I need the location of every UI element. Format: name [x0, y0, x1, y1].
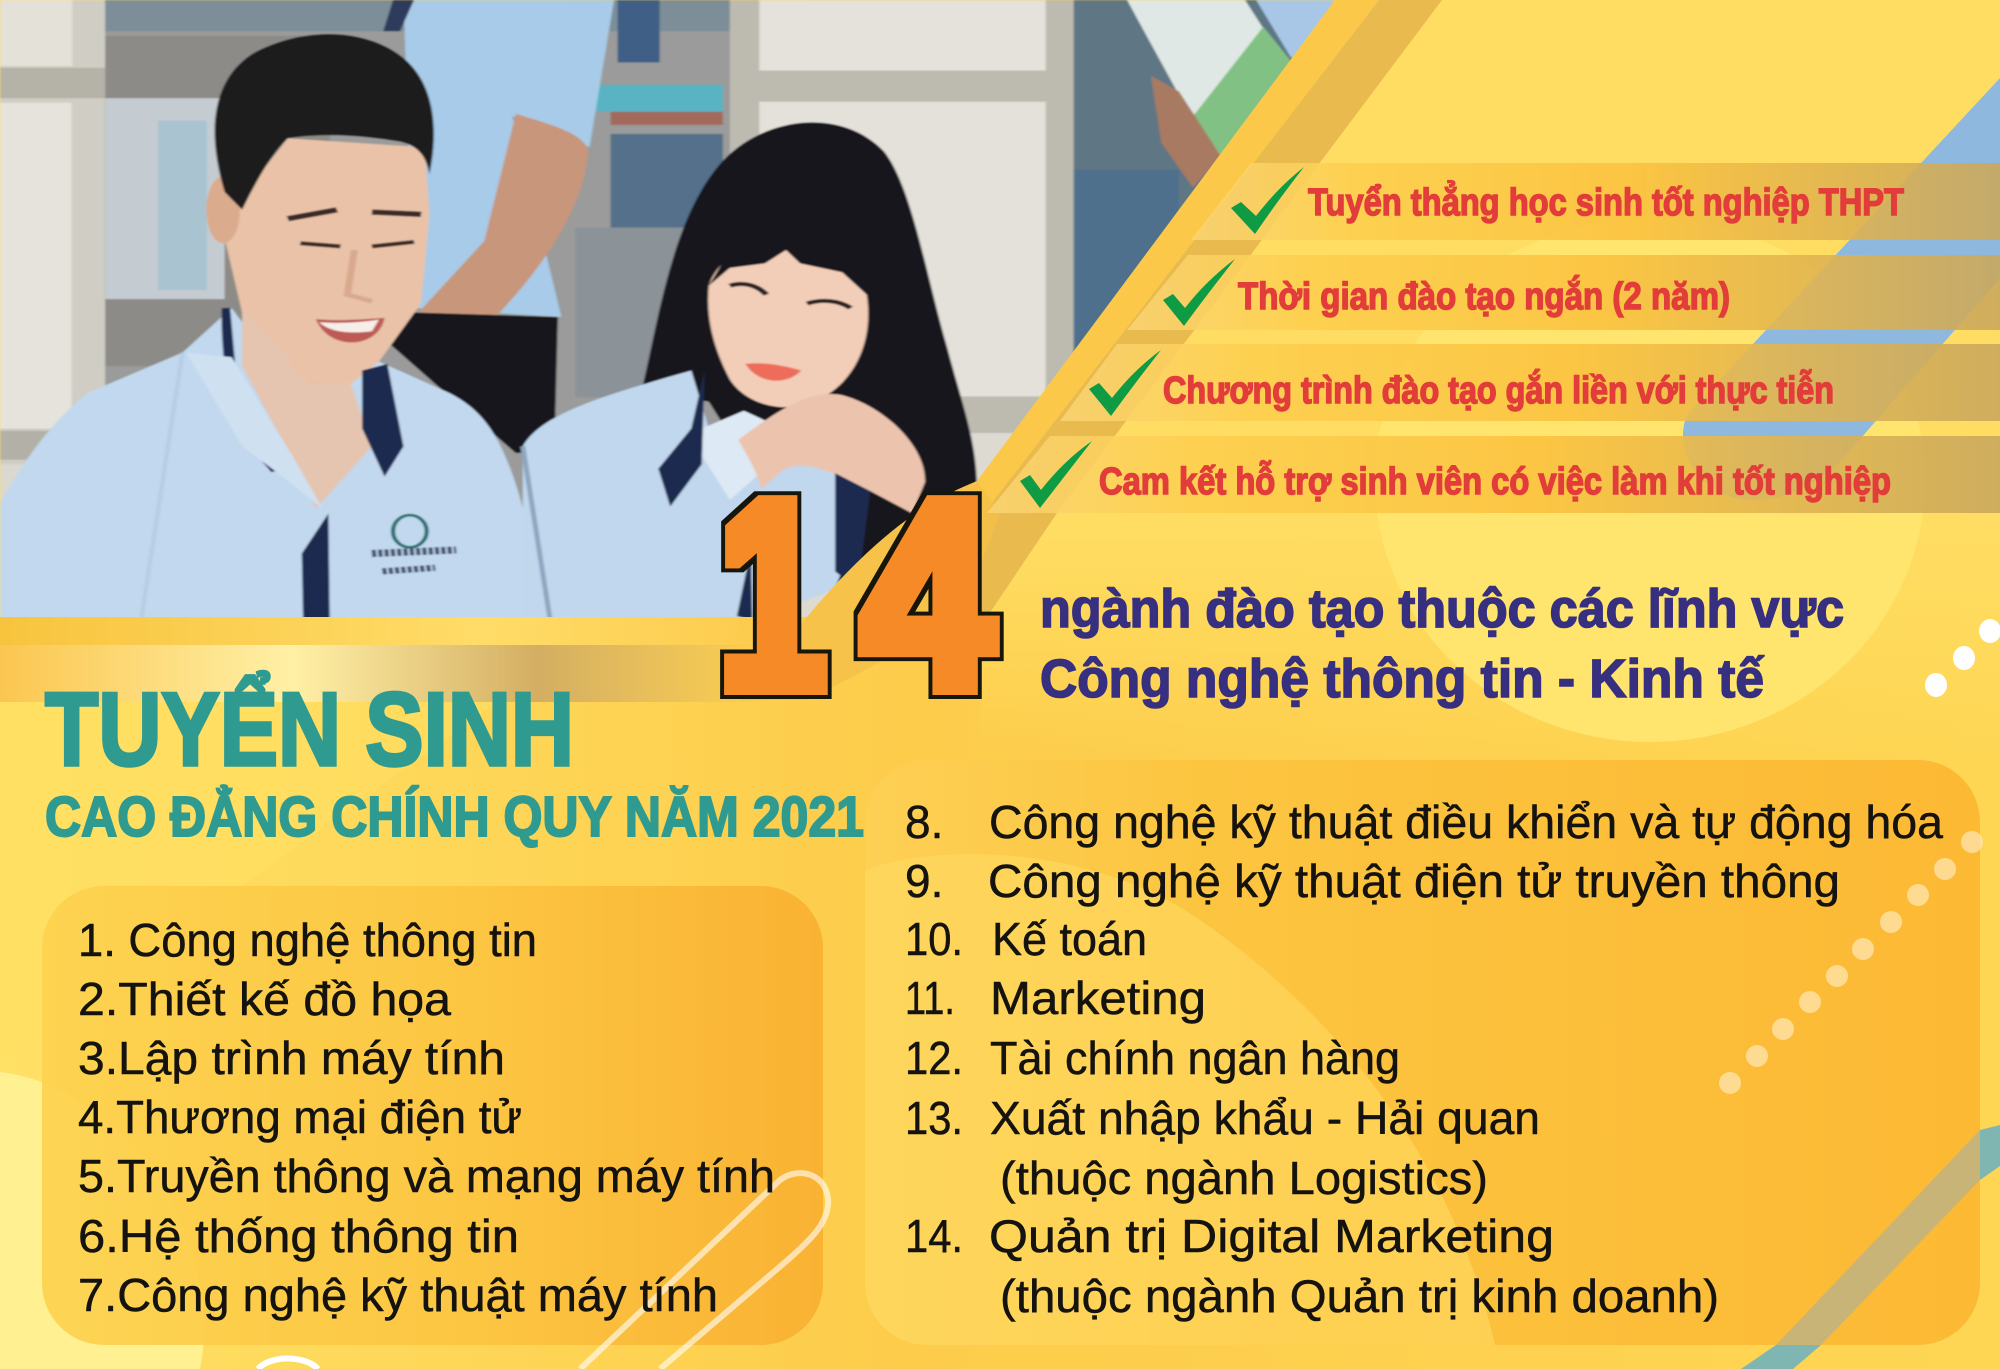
photo of students	[0, 0, 1333, 625]
programme list 8 to 14: 14.	[905, 1210, 963, 1262]
panel: left programmes background	[42, 886, 823, 1345]
right locker	[730, 0, 1333, 625]
icon: check 3	[1089, 350, 1161, 416]
icon: check 4	[1020, 441, 1092, 508]
panel: right programmes background	[865, 760, 1980, 1345]
big number 14: 1	[719, 445, 826, 746]
standing student	[382, 0, 616, 454]
programme list 8 to 14: (thuộc ngành Quản trị kinh doanh)	[1000, 1270, 1719, 1322]
big number 14	[719, 445, 996, 746]
benefit 2: Thời gian đào tạo ngắn (2 năm)	[1238, 274, 1730, 318]
programme list 8 to 14: 11.	[905, 972, 955, 1024]
icon: check 1	[1231, 167, 1304, 234]
programme list 1 to 7	[78, 914, 775, 1321]
programme list 8 to 14: 9.	[905, 855, 943, 907]
male student	[0, 34, 554, 625]
programme list 1 to 7: 4.Thương mại điện tử	[78, 1091, 522, 1143]
benefit 4: Cam kết hỗ trợ sinh viên có việc làm khi tốt nghiệp	[1099, 459, 1891, 503]
programme list 8 to 14: Tài chính ngân hàng	[990, 1032, 1400, 1084]
decorative white rounded outline	[258, 1173, 828, 1369]
programme list 8 to 14: 12.	[905, 1032, 963, 1084]
programme list 8 to 14: 10.	[905, 913, 963, 965]
left locker	[0, 0, 106, 504]
programme list 8 to 14: Quản trị Digital Marketing	[989, 1210, 1554, 1262]
programme list 1 to 7: 3.Lập trình máy tính	[78, 1032, 505, 1084]
heading: fields of study	[1040, 579, 1844, 709]
programme list 8 to 14: Công nghệ kỹ thuật điện tử truyền thông	[988, 855, 1840, 907]
shelves	[104, 0, 730, 497]
panel: right band stripes	[987, 163, 2000, 513]
programme list 8 to 14: (thuộc ngành Logistics)	[1000, 1152, 1488, 1204]
heading: fields of study: ngành đào tạo thuộc các lĩnh vực	[1040, 579, 1844, 639]
title: TUYỂN SINH	[45, 671, 574, 788]
programme list 8 to 14: Công nghệ kỹ thuật điều khiển và tự động hóa	[989, 796, 1943, 848]
programme list 8 to 14: Xuất nhập khẩu - Hải quan	[990, 1092, 1540, 1144]
programme list 8 to 14	[905, 796, 1943, 1322]
programme list 8 to 14: Marketing	[990, 972, 1206, 1024]
book and hand	[1127, 0, 1333, 187]
programme list 8 to 14: 8.	[905, 796, 943, 848]
programme list 1 to 7: 1. Công nghệ thông tin	[78, 914, 537, 966]
icon: check 2	[1163, 259, 1235, 326]
programme list 1 to 7: 2.Thiết kế đồ họa	[78, 973, 451, 1025]
panel: pale curved area in right panel	[865, 854, 1495, 1345]
big number 14: 4	[861, 445, 996, 746]
heading: fields of study: Công nghệ thông tin - Kinh tế	[1040, 649, 1765, 709]
subtitle: CAO ĐẲNG CHÍNH QUY NĂM 2021	[45, 784, 864, 849]
programme list 1 to 7: 5.Truyền thông và mạng máy tính	[78, 1150, 775, 1202]
programme list 1 to 7: 6.Hệ thống thông tin	[78, 1210, 519, 1262]
female student	[523, 122, 977, 625]
programme list 8 to 14: Kế toán	[992, 913, 1147, 965]
programme list 8 to 14: 13.	[905, 1092, 963, 1144]
decorative diagonal bar	[1741, 1125, 2000, 1369]
decorative pale dots	[1719, 831, 1983, 1094]
benefit 1: Tuyển thẳng học sinh tốt nghiệp THPT	[1308, 179, 1904, 224]
gold banner behind title	[0, 645, 770, 702]
benefit 3: Chương trình đào tạo gắn liền với thực tiễn	[1163, 368, 1834, 412]
decorative white dots	[1925, 619, 2000, 697]
decorative top strip under photo	[0, 617, 800, 646]
programme list 1 to 7: 7.Công nghệ kỹ thuật máy tính	[78, 1269, 718, 1321]
